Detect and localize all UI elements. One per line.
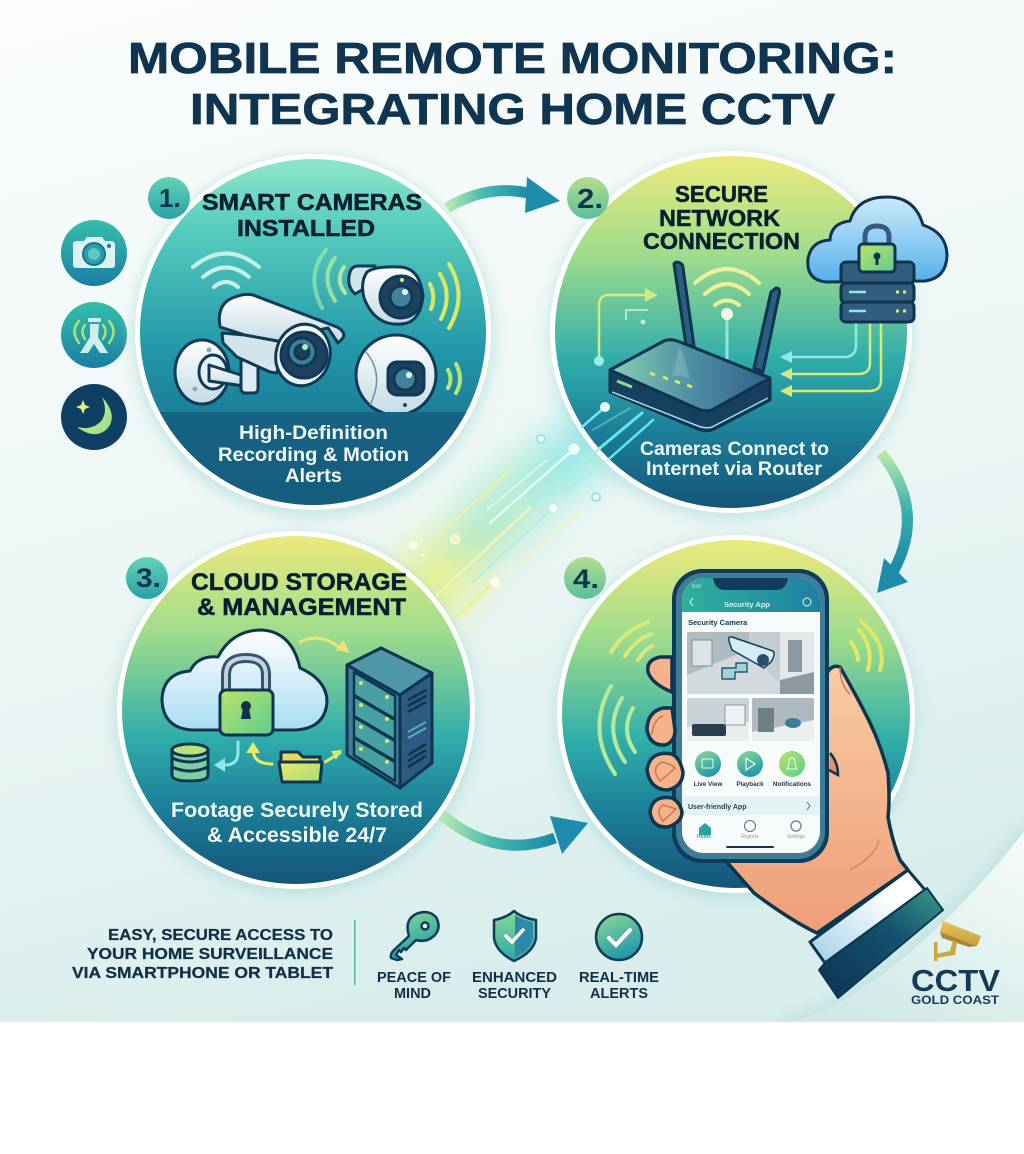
finger nails — [652, 716, 676, 821]
icon: bullet security camera — [175, 294, 344, 404]
arrow: step 1 to step 2 — [447, 177, 560, 213]
caption: high-definition recording — [218, 423, 409, 487]
benefit: enhanced security: ENHANCED — [472, 969, 557, 986]
benefit: real-time alerts — [579, 914, 659, 1002]
heading: smart cameras installed — [202, 189, 422, 241]
badge: step 3: 3. — [136, 563, 161, 593]
panel: step 4 mobile app — [555, 535, 917, 899]
icon: dome camera — [356, 335, 436, 415]
icon: key — [391, 912, 439, 960]
caption: high-definition recording: High-Definition — [239, 423, 388, 444]
heading: cloud storage and management — [191, 569, 407, 621]
shirt cuff — [810, 870, 925, 963]
smartphone: Security Camera — [688, 618, 748, 627]
icon: signal waves — [599, 621, 882, 774]
heading: secure network connection: NETWORK — [659, 205, 780, 231]
title: INTEGRATING HOME CCTV — [190, 85, 836, 134]
footer text: easy secure access — [72, 927, 334, 982]
icon: shield — [494, 911, 536, 961]
icon: wifi waves — [193, 254, 259, 287]
bottom navigation — [699, 823, 711, 835]
icon: side camera — [61, 220, 127, 286]
badge: step 3 — [126, 557, 168, 599]
logo: cctv gold coast: CCTV — [911, 963, 1000, 998]
icon: mini camera — [349, 266, 423, 324]
benefit: peace of mind: MIND — [394, 985, 431, 1002]
badge: step 1 — [148, 177, 190, 219]
smartphone: Settings — [787, 834, 806, 840]
caption band — [160, 412, 466, 505]
title: MOBILE REMOTE MONITORING: — [128, 34, 897, 83]
icon: database — [172, 744, 208, 781]
heading: secure network connection: CONNECTION — [643, 228, 800, 254]
arrow: step 2 to step 4 — [877, 453, 908, 593]
badge: step 2 — [567, 177, 609, 219]
panel: step 1 smart cameras — [130, 154, 500, 518]
smartphone: Security App — [724, 600, 770, 609]
badge: step 4 — [564, 557, 606, 599]
heading: cloud storage and management: CLOUD STORAGE — [191, 569, 407, 596]
benefit: enhanced security: SECURITY — [478, 985, 551, 1002]
badge: step 4: 4. — [573, 564, 599, 594]
smartphone: Live View — [694, 781, 722, 788]
live camera thumbnail — [687, 632, 749, 675]
hand palm and wrist — [725, 666, 908, 933]
caption: cameras connect to internet: Internet via Router — [646, 459, 823, 480]
caption: cameras connect to internet — [640, 439, 829, 480]
caption: footage securely stored: & Accessible 24/7 — [207, 824, 387, 847]
heading: cloud storage and management: & MANAGEMENT — [197, 594, 406, 621]
smartphone — [672, 569, 829, 863]
app buttons — [695, 751, 721, 777]
icon: data flow arrows — [599, 295, 881, 391]
benefit: peace of mind: PEACE OF — [377, 969, 451, 986]
heading: secure network connection — [643, 181, 800, 254]
logo: cctv gold coast: GOLD COAST — [911, 993, 1000, 1007]
smartphone: User-friendly App — [688, 804, 746, 811]
arrow: step 3 to step 4 — [442, 815, 588, 854]
icon: side motion sensor — [61, 302, 127, 368]
icon: cloud with lock — [162, 630, 327, 735]
heading: smart cameras installed: SMART CAMERAS — [202, 189, 422, 215]
caption: cameras connect to internet: Cameras Connect to — [640, 439, 829, 460]
title — [128, 34, 897, 134]
smartphone: Notifications — [773, 781, 812, 788]
fingers — [647, 657, 683, 827]
user-friendly row — [682, 796, 820, 815]
smartphone: Home — [697, 834, 711, 840]
panel: step 2 secure network — [547, 151, 947, 520]
logo: cctv gold coast — [911, 921, 1000, 1007]
caption: footage securely stored: Footage Securely Stored — [171, 799, 423, 822]
smartphone: Playback — [736, 781, 764, 788]
footer text: easy secure access: VIA SMARTPHONE OR TABLET — [72, 965, 334, 982]
badge: step 1: 1. — [159, 183, 181, 213]
panel: step 3 cloud storage — [114, 531, 478, 896]
caption: footage securely stored — [171, 799, 423, 847]
caption: high-definition recording: Alerts — [285, 466, 342, 487]
icon: wifi signal — [695, 269, 759, 358]
glow behind data beams — [359, 378, 655, 653]
icon: flow arrows — [218, 638, 340, 765]
footer text: easy secure access: EASY, SECURE ACCESS TO — [108, 927, 333, 944]
jacket sleeve — [819, 888, 943, 998]
icon: folder — [279, 752, 322, 782]
connecting data beams — [408, 402, 653, 615]
heading: secure network connection: SECURE — [675, 181, 768, 207]
icon: side night mode — [61, 384, 127, 450]
heading: smart cameras installed: INSTALLED — [237, 215, 375, 241]
icon: router — [610, 262, 780, 431]
icon: cloud server with lock — [808, 197, 947, 322]
benefit: peace of mind — [377, 912, 451, 1002]
hand holding phone — [647, 569, 943, 998]
room thumbnails — [687, 698, 749, 727]
icon: motion signal waves — [314, 250, 460, 393]
badge: step 2: 2. — [577, 183, 603, 214]
benefit: enhanced security — [472, 911, 557, 1002]
smartphone: Reports — [741, 834, 759, 840]
caption: high-definition recording: Recording & Motion — [218, 445, 409, 466]
icon: check circle — [596, 914, 642, 960]
icon: server rack — [347, 648, 432, 788]
smartphone: 9:AI — [692, 584, 701, 590]
app header — [682, 578, 820, 612]
benefit: real-time alerts: ALERTS — [590, 985, 648, 1002]
icon: gold camera — [934, 921, 981, 961]
footer text: easy secure access: YOUR HOME SURVEILLANCE — [87, 946, 333, 963]
benefit: real-time alerts: REAL-TIME — [579, 969, 659, 986]
